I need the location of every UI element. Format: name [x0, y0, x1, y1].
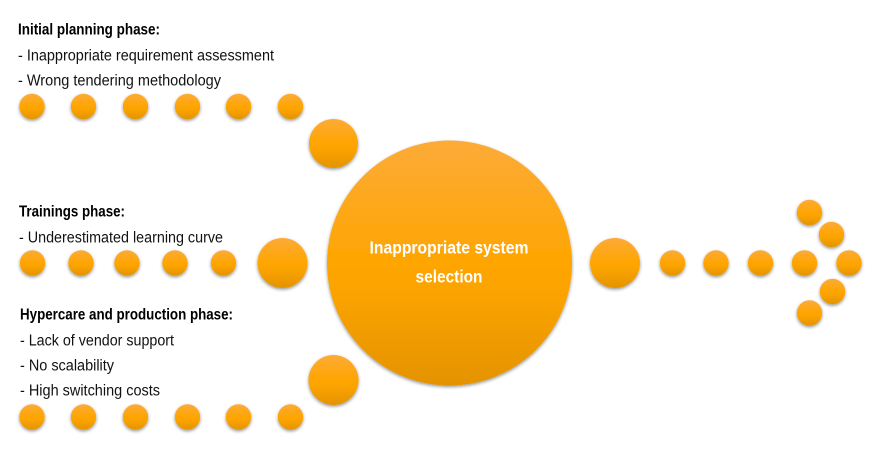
dotted arrow: initial planning phase: [19, 94, 358, 168]
heading and list: hypercare and production phase: - Lack of vendor support: [20, 332, 175, 350]
heading and list: trainings phase: - Underestimated learning curve: [19, 230, 223, 246]
heading and list: initial planning phase: - Wrong tendering methodology: [18, 72, 221, 90]
central circle: inappropriate system selection: selection: [416, 266, 482, 286]
dotted arrow: hypercare and production phase: [19, 355, 359, 430]
heading and list: initial planning phase: Initial planning phase:: [18, 22, 160, 38]
heading and list: trainings phase: Trainings phase:: [19, 204, 125, 220]
heading and list: hypercare and production phase: [20, 306, 233, 400]
heading and list: trainings phase: [19, 204, 223, 246]
heading and list: hypercare and production phase: - High switching costs: [20, 382, 160, 400]
heading and list: hypercare and production phase: Hypercare and production phase:: [20, 306, 233, 324]
outgoing dotted arrow: [590, 200, 862, 326]
heading and list: initial planning phase: - Inappropriate requirement assessment: [18, 48, 275, 64]
heading and list: hypercare and production phase: - No scalability: [20, 358, 114, 374]
central circle: inappropriate system selection: [327, 140, 572, 386]
heading and list: initial planning phase: [18, 22, 275, 90]
dotted arrow: trainings phase: [20, 238, 308, 288]
central circle: inappropriate system selection: Inappropriate system: [370, 238, 528, 258]
